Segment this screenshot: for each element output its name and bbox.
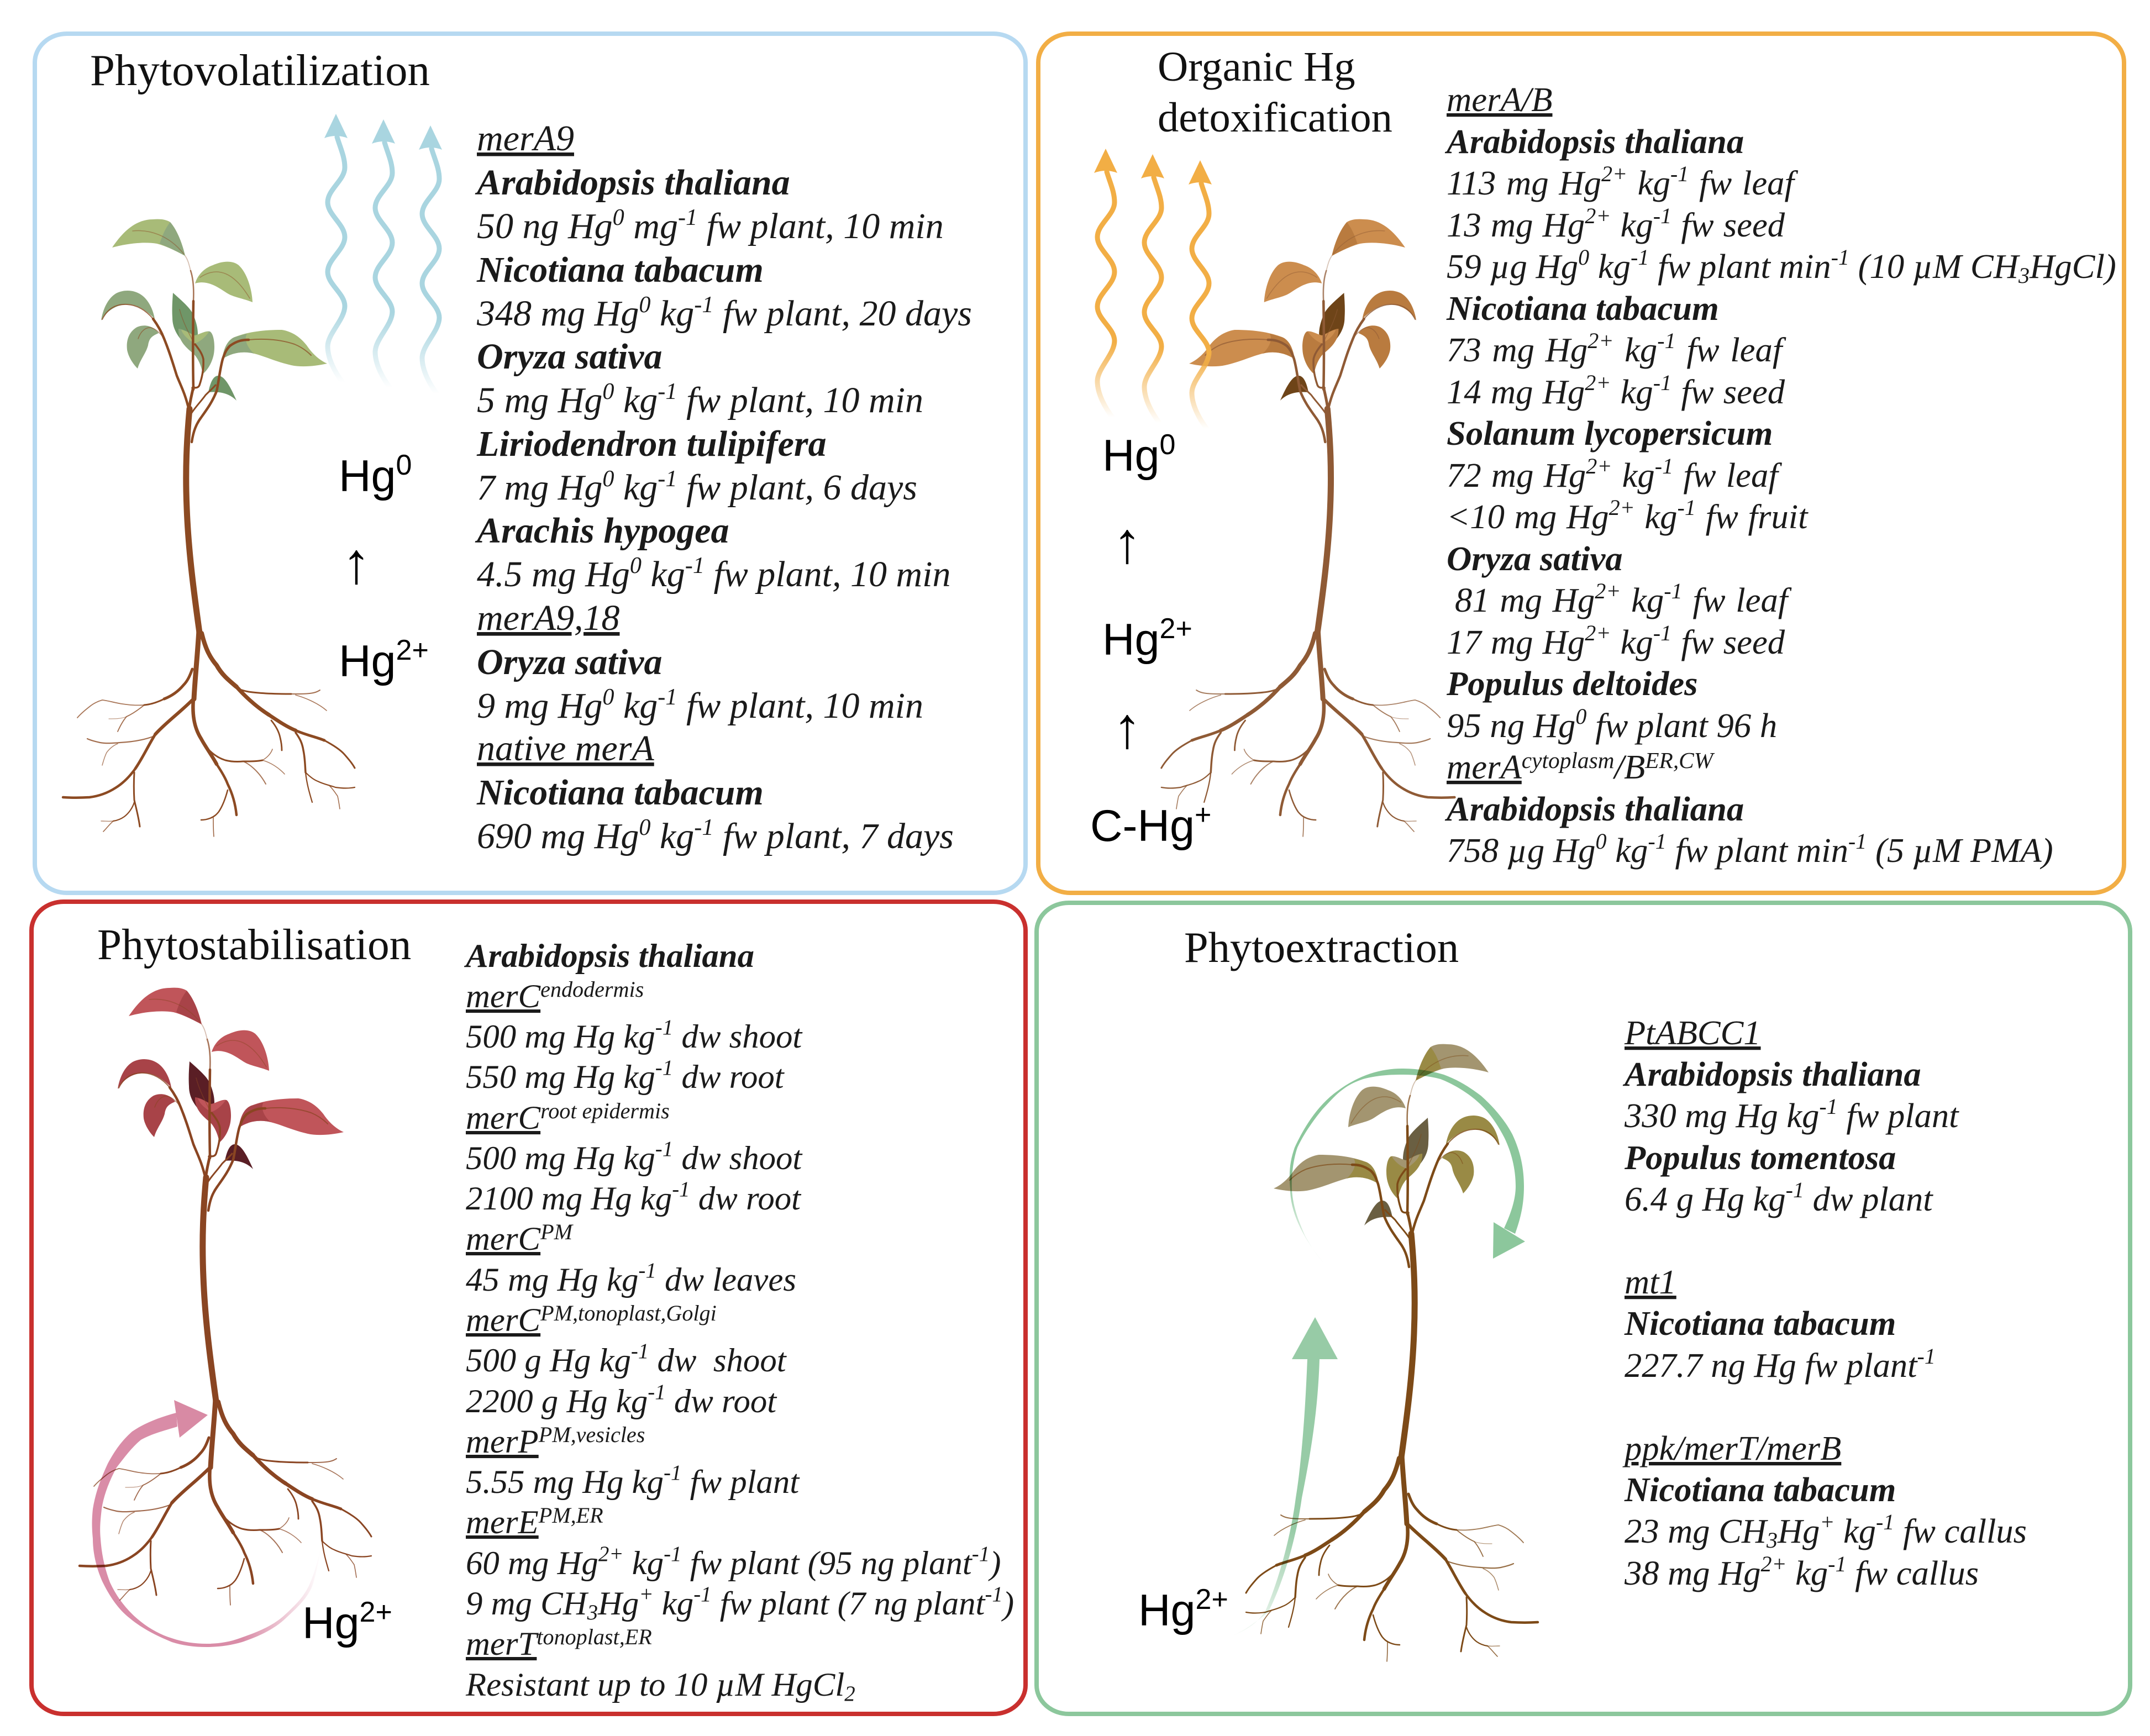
heading: Organic Hg detoxification: Organic Hg <box>1158 43 1355 90</box>
label: Hg0 to Hg2+ conversion: Hg2+ <box>339 634 429 686</box>
text block: transgenic species and volatilisation rates: merA9 <box>477 118 574 159</box>
text block: transgenic gene constructs and accumulation: 9 mg CH3Hg+ kg-1 fw plant (7 ng plant-1) <box>466 1582 1014 1624</box>
text block: transgenic species and detoxification rates: Arabidopsis thaliana <box>1444 790 1744 828</box>
text block: transgenic species and detoxification rates: Arabidopsis thaliana <box>1444 122 1744 161</box>
text block: transgenic genes and accumulation: 23 mg CH3Hg+ kg-1 fw callus <box>1625 1509 2027 1553</box>
text block: transgenic species and volatilisation rates: 9 mg Hg0 kg-1 fw plant, 10 min <box>477 684 923 726</box>
text block: transgenic genes and accumulation: 227.7 ng Hg fw plant-1 <box>1625 1344 1936 1385</box>
text block: transgenic genes and accumulation: mt1 <box>1625 1262 1676 1301</box>
text block: transgenic gene constructs and accumulation: merPPM,vesicles <box>466 1422 645 1460</box>
arrows: volatilised mercury rising <box>324 114 442 394</box>
text block: transgenic species and volatilisation rates <box>475 118 972 856</box>
text block: transgenic gene constructs and accumulation: 550 mg Hg kg-1 dw root <box>466 1056 785 1096</box>
text block: transgenic species and detoxification rates: 17 mg Hg2+ kg-1 fw seed <box>1447 620 1785 661</box>
text block: transgenic species and detoxification rates: 758 µg Hg0 kg-1 fw plant min-1 (5 µM PMA) <box>1447 829 2053 870</box>
label: C-Hg+ to Hg2+ to Hg0 conversion: Hg2+ <box>1102 613 1192 665</box>
panel: Phytovolatilization <box>35 34 1026 893</box>
text block: transgenic species and volatilisation rates: native merA <box>477 728 654 769</box>
arrow: upward translocation from roots <box>1231 1317 1338 1637</box>
text block: transgenic species and volatilisation rates: Liriodendron tulipifera <box>476 424 827 464</box>
text block: transgenic gene constructs and accumulation: merTtonoplast,ER <box>466 1624 652 1663</box>
text block: transgenic species and volatilisation rates: Nicotiana tabacum <box>476 772 764 813</box>
text block: transgenic species and volatilisation rates: 50 ng Hg0 mg-1 fw plant, 10 min <box>477 204 944 246</box>
text block: transgenic gene constructs and accumulation: merCPM <box>466 1219 574 1258</box>
text block: transgenic gene constructs and accumulation: 60 mg Hg2+ kg-1 fw plant (95 ng plant-1) <box>466 1542 1001 1582</box>
text block: transgenic species and detoxification rates: 81 mg Hg2+ kg-1 fw leaf <box>1455 578 1792 619</box>
text block: transgenic genes and accumulation <box>1622 1013 2027 1592</box>
text block: transgenic gene constructs and accumulation: merCPM,tonoplast,Golgi <box>466 1301 717 1339</box>
panel border <box>31 902 1026 1714</box>
text block: transgenic genes and accumulation: 38 mg Hg2+ kg-1 fw callus <box>1624 1551 1979 1592</box>
text block: transgenic species and detoxification rates: Solanum lycopersicum <box>1447 414 1773 453</box>
text block: transgenic species and detoxification rates: merAcytoplasm/BER,CW <box>1447 748 1715 786</box>
arrow: circular translocation around the shoot <box>1290 1069 1525 1264</box>
text block: transgenic species and detoxification rates: 113 mg Hg2+ kg-1 fw leaf <box>1447 161 1799 202</box>
text block: transgenic genes and accumulation: ppk/merT/merB <box>1622 1429 1841 1467</box>
text block: transgenic genes and accumulation: 6.4 g Hg kg-1 dw plant <box>1625 1177 1933 1218</box>
heading: Phytostabilisation: Phytostabilisation <box>97 920 411 969</box>
text block: transgenic species and detoxification rates: 72 mg Hg2+ kg-1 fw leaf <box>1447 454 1782 495</box>
panel border <box>1038 34 2124 893</box>
label: Hg2+: Hg2+ <box>302 1596 392 1648</box>
heading: Organic Hg detoxification: detoxification <box>1158 94 1392 141</box>
text block: transgenic species and volatilisation rates: Arachis hypogea <box>475 511 729 551</box>
arrows: volatilised mercury rising <box>1094 149 1212 429</box>
text block: transgenic genes and accumulation: PtABCC1 <box>1624 1013 1761 1052</box>
text block: transgenic gene constructs and accumulation: 45 mg Hg kg-1 dw leaves <box>466 1259 796 1298</box>
text block: transgenic gene constructs and accumulation: merCendodermis <box>466 977 644 1015</box>
label: Hg0 to Hg2+ conversion: Hg0 <box>339 449 412 501</box>
text block: transgenic species and volatilisation rates: 348 mg Hg0 kg-1 fw plant, 20 days <box>476 292 972 334</box>
text block: transgenic species and volatilisation rates: 690 mg Hg0 kg-1 fw plant, 7 days <box>477 814 954 856</box>
text block: transgenic gene constructs and accumulation: 2100 mg Hg kg-1 dw root <box>466 1177 802 1217</box>
text block: transgenic species and detoxification rates: 13 mg Hg2+ kg-1 fw seed <box>1447 203 1785 244</box>
text block: transgenic gene constructs and accumulation: 500 g Hg kg-1 dw shoot <box>466 1339 787 1379</box>
text block: transgenic species and volatilisation rates: 7 mg Hg0 kg-1 fw plant, 6 days <box>477 466 917 508</box>
text block: transgenic species and detoxification rates: 73 mg Hg2+ kg-1 fw leaf <box>1447 328 1786 369</box>
icon: red plant <box>80 988 371 1605</box>
text block: transgenic species and detoxification rates: 14 mg Hg2+ kg-1 fw seed <box>1447 370 1785 411</box>
text block: transgenic genes and accumulation: 330 mg Hg kg-1 fw plant <box>1624 1094 1959 1135</box>
text block: transgenic gene constructs and accumulation: Arabidopsis thaliana <box>464 938 754 975</box>
text block: transgenic genes and accumulation: Nicotiana tabacum <box>1624 1304 1896 1343</box>
text block: transgenic species and volatilisation rates: Nicotiana tabacum <box>476 250 764 290</box>
label: Hg2+: Hg2+ <box>1138 1584 1228 1635</box>
label: Hg0 to Hg2+ conversion: ↑ <box>342 531 371 596</box>
text block: transgenic genes and accumulation: Arabidopsis thaliana <box>1622 1055 1921 1093</box>
text block: transgenic genes and accumulation: Populus tomentosa <box>1624 1138 1896 1177</box>
text block: transgenic gene constructs and accumulation: merEPM,ER <box>466 1503 603 1541</box>
text block: transgenic gene constructs and accumulation: 500 mg Hg kg-1 dw shoot <box>466 1137 803 1177</box>
text block: transgenic species and volatilisation rates: 5 mg Hg0 kg-1 fw plant, 10 min <box>477 378 923 420</box>
text block: transgenic gene constructs and accumulation: Resistant up to 10 µM HgCl2 <box>465 1666 855 1706</box>
panel: Phytoextraction <box>1037 903 2130 1714</box>
text block: transgenic species and detoxification rates: Populus deltoides <box>1446 664 1698 703</box>
icon: olive plant <box>1246 1044 1538 1661</box>
label: C-Hg+ to Hg2+ to Hg0 conversion: ↑ <box>1113 511 1142 575</box>
text block: transgenic gene constructs and accumulation: 5.55 mg Hg kg-1 fw plant <box>466 1461 800 1501</box>
text block: transgenic species and detoxification rates: Oryza sativa <box>1447 539 1623 578</box>
panel border <box>1037 903 2130 1714</box>
text block: transgenic species and volatilisation rates: Oryza sativa <box>477 642 662 682</box>
text block: transgenic species and detoxification rates: 95 ng Hg0 fw plant 96 h <box>1447 704 1777 745</box>
text block: transgenic gene constructs and accumulation: 500 mg Hg kg-1 dw shoot <box>466 1016 803 1055</box>
label: C-Hg+ to Hg2+ to Hg0 conversion: Hg0 <box>1102 429 1175 481</box>
text block: transgenic species and volatilisation rates: 4.5 mg Hg0 kg-1 fw plant, 10 min <box>477 553 950 595</box>
text block: transgenic species and detoxification rates: 59 µg Hg0 kg-1 fw plant min-1 (10 µM CH3HgCl) <box>1447 245 2116 288</box>
text block: transgenic gene constructs and accumulation <box>464 938 1014 1706</box>
text block: transgenic species and detoxification rates: Nicotiana tabacum <box>1446 289 1719 328</box>
icon: green plant <box>63 219 355 837</box>
text block: transgenic species and volatilisation rates: Oryza sativa <box>477 336 662 377</box>
icon: orange plant <box>1161 219 1454 837</box>
text block: transgenic species and detoxification rates: <10 mg Hg2+ kg-1 fw fruit <box>1447 495 1809 536</box>
label: Hg0 to Hg2+ conversion <box>339 449 429 686</box>
text block: transgenic gene constructs and accumulation: 2200 g Hg kg-1 dw root <box>466 1380 777 1420</box>
label: C-Hg+ to Hg2+ to Hg0 conversion <box>1090 429 1211 851</box>
text block: transgenic species and detoxification rates <box>1444 80 2116 870</box>
label: C-Hg+ to Hg2+ to Hg0 conversion: ↑ <box>1113 696 1142 760</box>
panel: Phytostabilisation <box>31 902 1026 1714</box>
heading: Phytoextraction: Phytoextraction <box>1184 923 1459 971</box>
panel: Organic Hg detoxification <box>1038 34 2124 893</box>
text block: transgenic genes and accumulation: Nicotiana tabacum <box>1624 1470 1896 1509</box>
text block: transgenic species and volatilisation rates: Arabidopsis thaliana <box>475 162 790 203</box>
text block: transgenic gene constructs and accumulation: merCroot epidermis <box>466 1098 670 1137</box>
text block: transgenic species and detoxification rates: merA/B <box>1447 80 1553 119</box>
heading: Phytovolatilization: Phytovolatilization <box>90 46 430 95</box>
panel border <box>35 34 1026 893</box>
arrow: circular uptake into root <box>92 1400 321 1647</box>
text block: transgenic species and volatilisation rates: merA9,18 <box>477 598 619 638</box>
label: C-Hg+ to Hg2+ to Hg0 conversion: C-Hg+ <box>1090 799 1211 851</box>
